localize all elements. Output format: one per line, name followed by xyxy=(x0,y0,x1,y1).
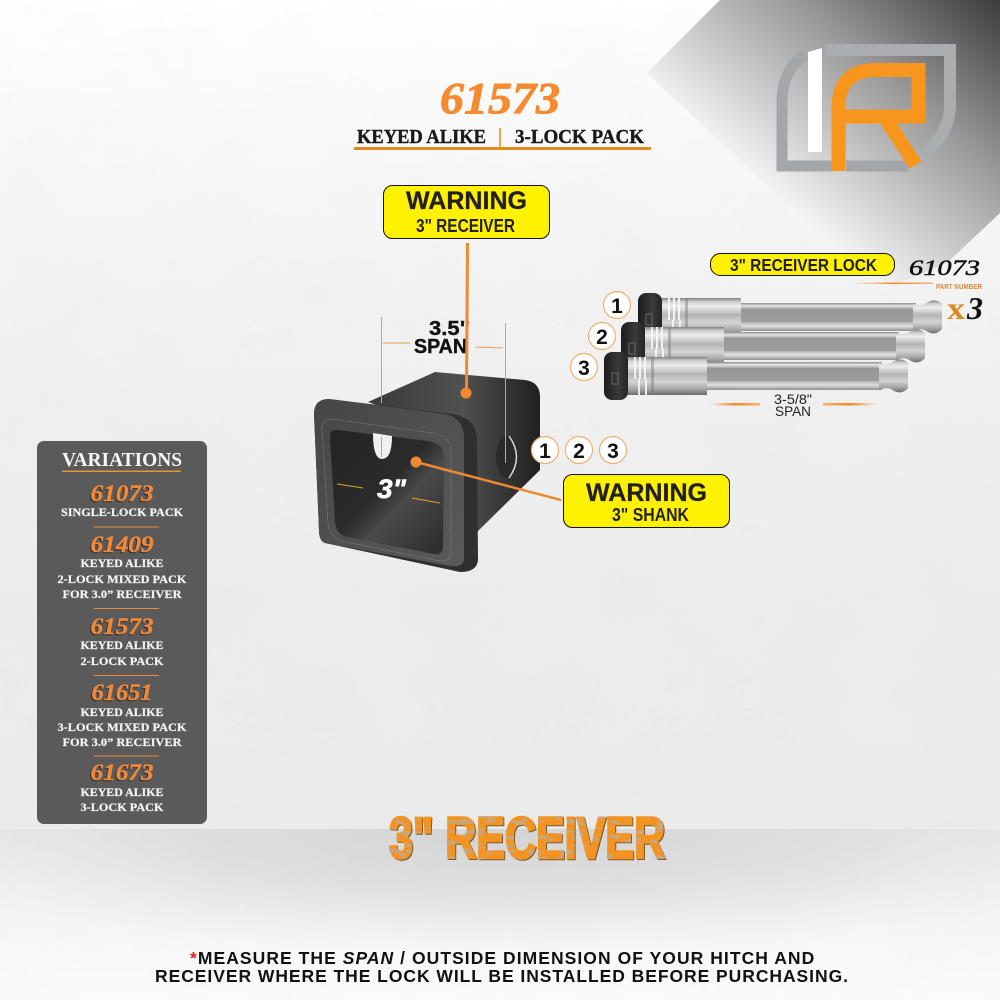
variation 61673 xyxy=(80,760,164,814)
number badges on locks xyxy=(570,292,630,380)
3 inch label: 3" xyxy=(377,474,407,504)
variation 61073: 61073 xyxy=(90,481,154,506)
number badges on locks: 2 xyxy=(596,326,608,349)
variation 61673: KEYED ALIKE xyxy=(80,787,164,799)
hitch receiver illustration xyxy=(314,372,540,572)
three locks xyxy=(604,293,942,400)
variation 61673: 3-LOCK PACK xyxy=(80,802,164,814)
warning callout: receiver: WARNING xyxy=(406,187,527,215)
warning callout: shank xyxy=(564,474,730,528)
span dimension: 3-5/8 inch: 3-5/8" xyxy=(774,392,812,407)
variation 61573: 61573 xyxy=(90,614,154,639)
variation 61673: 61673 xyxy=(90,761,152,786)
variation 61409: 61409 xyxy=(90,533,153,558)
panel: variations xyxy=(37,441,207,824)
label: receiver lock: 3" RECEIVER LOCK xyxy=(730,255,877,275)
variation 61409: KEYED ALIKE xyxy=(80,558,164,570)
variation 61573: 2-LOCK PACK xyxy=(80,656,164,668)
variation 61651: FOR 3.0” RECEIVER xyxy=(62,737,182,749)
top pin hole xyxy=(373,433,392,459)
span dimension: 3.5 inch xyxy=(382,317,506,463)
footnote xyxy=(155,948,848,986)
variation 61651: 61651 xyxy=(92,680,152,705)
panel heading: VARIATIONS xyxy=(62,449,182,471)
number badges on receiver xyxy=(532,436,626,464)
variation 61409: 2-LOCK MIXED PACK xyxy=(58,574,187,586)
label: lock part number: 61073 xyxy=(909,255,980,280)
variation 61073: SINGLE-LOCK PACK xyxy=(61,507,183,519)
label: quantity x3 xyxy=(947,290,983,326)
span dimension: 3-5/8 inch xyxy=(710,392,877,419)
number badges on receiver: 1 xyxy=(539,440,551,463)
variation 61573: KEYED ALIKE xyxy=(80,640,164,652)
warning callout: shank: WARNING xyxy=(586,479,707,507)
corner gradient diamond xyxy=(647,0,1000,293)
lock 3 xyxy=(604,352,908,400)
lock 1 xyxy=(638,293,942,341)
logo: orange R xyxy=(838,70,918,171)
variation 61409: 61409 xyxy=(90,532,154,557)
big heading: 3 inch receiver: 3" RECEIVER xyxy=(389,806,665,871)
flange inner outline xyxy=(322,419,451,561)
big heading: 3 inch receiver: 3" RECEIVER xyxy=(390,807,666,872)
variation 61673: 61673 xyxy=(90,760,154,785)
variation 61409: FOR 3.0” RECEIVER xyxy=(62,589,182,601)
warning callout: shank: 3" SHANK xyxy=(612,505,689,525)
label: lock part number: PART NUMBER xyxy=(936,282,982,291)
receiver body xyxy=(368,372,540,532)
number badges on locks: 1 xyxy=(611,295,623,318)
number badges on receiver: 2 xyxy=(573,440,585,463)
side pin hole xyxy=(496,436,518,478)
variation 61409 xyxy=(58,532,187,609)
variation 61651: KEYED ALIKE xyxy=(80,707,164,719)
title: part number: 61573 xyxy=(440,74,560,123)
warning callout: receiver xyxy=(384,186,550,238)
logo: grey leaf outline xyxy=(782,54,908,166)
number badges on receiver: 3 xyxy=(607,440,619,463)
variation 61573 xyxy=(80,614,164,676)
span dimension: 3.5 inch: 3.5" xyxy=(429,318,470,340)
variation 61573: 61573 xyxy=(90,615,152,640)
lock 2 xyxy=(621,322,925,370)
big heading: 3 inch receiver: 3" RECEIVER xyxy=(389,806,665,871)
leader line: shank xyxy=(410,456,561,500)
opening xyxy=(330,430,444,554)
leader line: receiver xyxy=(460,243,472,398)
variation 61651 xyxy=(58,680,187,756)
number badges on locks: 3 xyxy=(578,357,590,380)
warning callout: receiver: 3" RECEIVER xyxy=(416,216,515,236)
logo: white I xyxy=(808,48,822,152)
variation 61651: 3-LOCK MIXED PACK xyxy=(58,722,187,734)
subtitle: pack description: 3-LOCK PACK xyxy=(515,127,645,148)
subtitle: pack description xyxy=(354,127,651,150)
variation 61073: 61073 xyxy=(90,482,152,507)
subtitle: pack description: KEYED ALIKE xyxy=(357,127,486,148)
footnote: *MEASURE THE SPAN / OUTSIDE DIMENSION OF YOUR HITCH AND xyxy=(190,948,815,968)
span dimension: 3-5/8 inch: SPAN xyxy=(775,404,811,419)
variation 61651: 61651 xyxy=(90,681,152,706)
span dimension: 3.5 inch: SPAN xyxy=(414,336,467,358)
variation 61073 xyxy=(61,481,183,528)
label: quantity x3: 3 xyxy=(966,290,983,326)
label: lock part number xyxy=(853,255,982,291)
logo xyxy=(782,48,950,171)
flange xyxy=(314,399,478,572)
label: quantity x3: x xyxy=(947,290,965,326)
footnote: RECEIVER WHERE THE LOCK WILL BE INSTALLED BEFORE PURCHASING. xyxy=(155,966,848,986)
